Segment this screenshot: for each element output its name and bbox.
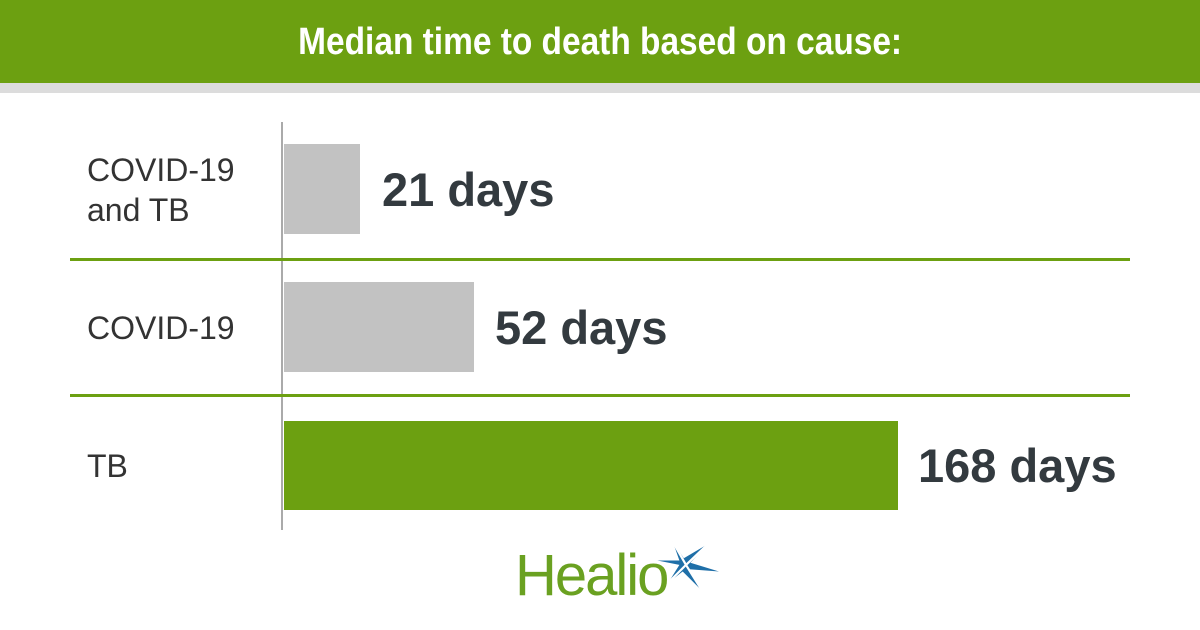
bar: COVID-19 and TB xyxy=(284,144,360,234)
value: 168 days: 168 days xyxy=(918,439,1117,492)
header banner xyxy=(0,0,1200,83)
bar: COVID-19 xyxy=(284,282,474,372)
value: 52 days: 52 days xyxy=(495,301,667,354)
row label: TB: TB xyxy=(87,448,128,484)
bar: TB xyxy=(284,421,898,510)
header shadow strip xyxy=(0,83,1200,93)
row label: COVID-19: COVID-19 xyxy=(87,310,235,346)
title: Median time to death based on cause: xyxy=(298,21,902,63)
row label: COVID-19 and TB: COVID-19 xyxy=(87,152,235,188)
icon: star xyxy=(658,546,719,588)
row label: COVID-19 and TB xyxy=(87,152,235,228)
logo: Healio: Healio xyxy=(515,543,667,608)
value: 21 days: 21 days xyxy=(382,163,554,216)
row label: COVID-19 and TB: and TB xyxy=(87,192,190,228)
axis line xyxy=(281,122,283,530)
